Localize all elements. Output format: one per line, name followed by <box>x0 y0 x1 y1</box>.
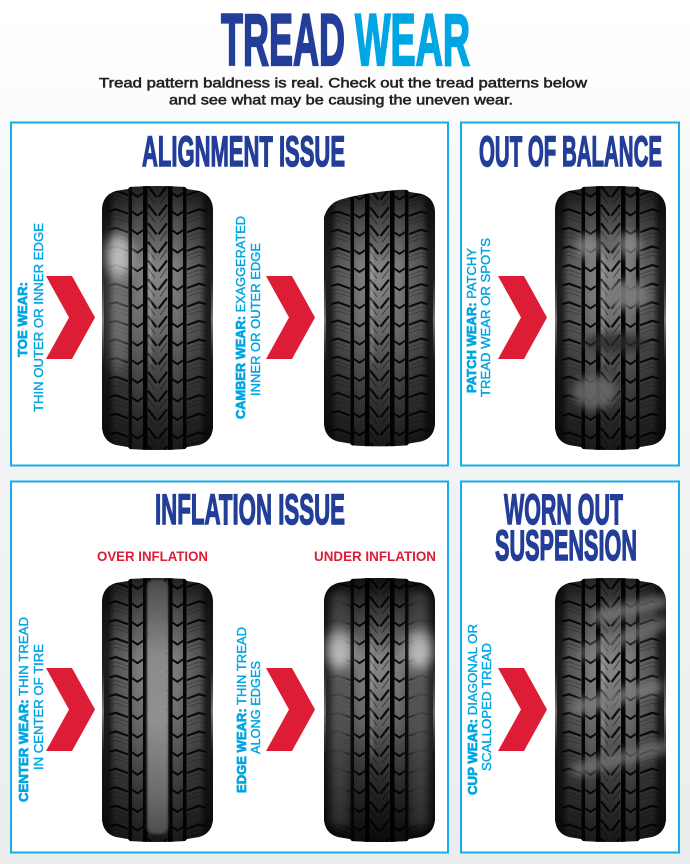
tire: under inflation <box>324 577 435 843</box>
label: edge wear <box>234 627 263 793</box>
label: edge wear: ALONG EDGES <box>248 661 263 754</box>
arrow: cup wear <box>498 668 547 751</box>
label: center wear: CENTER WEAR: THIN TREAD <box>16 617 31 802</box>
label: cup wear: CUP WEAR: DIAGONAL OR <box>465 624 480 795</box>
heading: inflation issue: INFLATION ISSUE <box>155 486 345 534</box>
tire: center wear <box>102 577 213 843</box>
label: cup wear: SCALLOPED TREAD <box>479 643 494 771</box>
arrow: edge wear <box>266 668 315 751</box>
arrow: center wear <box>46 668 95 751</box>
tire: cup wear <box>555 577 666 843</box>
tire: toe wear <box>102 185 213 451</box>
tire: patch wear <box>555 185 666 451</box>
title: WEAR <box>355 0 470 81</box>
label: patch wear: PATCH WEAR: PATCHY <box>464 248 479 393</box>
label: patch wear: TREAD WEAR OR SPOTS <box>478 238 493 397</box>
label: toe wear: TOE WEAR: <box>15 282 30 357</box>
label: camber wear: INNER OR OUTER EDGE <box>248 243 263 396</box>
title: TREAD <box>221 0 345 81</box>
label: toe wear: THIN OUTER OR INNER EDGE <box>31 223 46 412</box>
panel: alignment issue <box>11 122 448 466</box>
label: center wear: IN CENTER OF TIRE <box>31 644 46 770</box>
panel: inflation issue <box>11 482 448 852</box>
intro text <box>99 74 588 108</box>
arrow: patch wear <box>498 276 547 359</box>
panel: out of balance <box>461 122 679 466</box>
label: edge wear: EDGE WEAR: THIN TREAD <box>234 627 249 793</box>
label: patch wear <box>464 238 493 397</box>
tire: camber wear <box>321 185 435 447</box>
intro text: Tread pattern baldness is real. Check out the tread patterns below <box>99 74 588 90</box>
intro text: and see what may be causing the uneven wear. <box>169 92 513 108</box>
arrow: toe wear <box>46 276 95 359</box>
label: toe wear <box>15 223 46 412</box>
panel: worn out suspension <box>461 482 679 852</box>
label: camber wear: CAMBER WEAR: EXAGGERATED <box>233 216 248 419</box>
subheading: under inflation: UNDER INFLATION <box>314 549 436 564</box>
label: center wear <box>16 617 46 802</box>
label: cup wear <box>465 624 494 795</box>
label: camber wear <box>233 216 263 419</box>
subheading: over inflation: OVER INFLATION <box>97 549 208 564</box>
heading: worn out suspension <box>495 486 637 570</box>
heading: alignment issue: ALIGNMENT ISSUE <box>142 128 345 176</box>
arrow: camber wear <box>266 276 315 359</box>
